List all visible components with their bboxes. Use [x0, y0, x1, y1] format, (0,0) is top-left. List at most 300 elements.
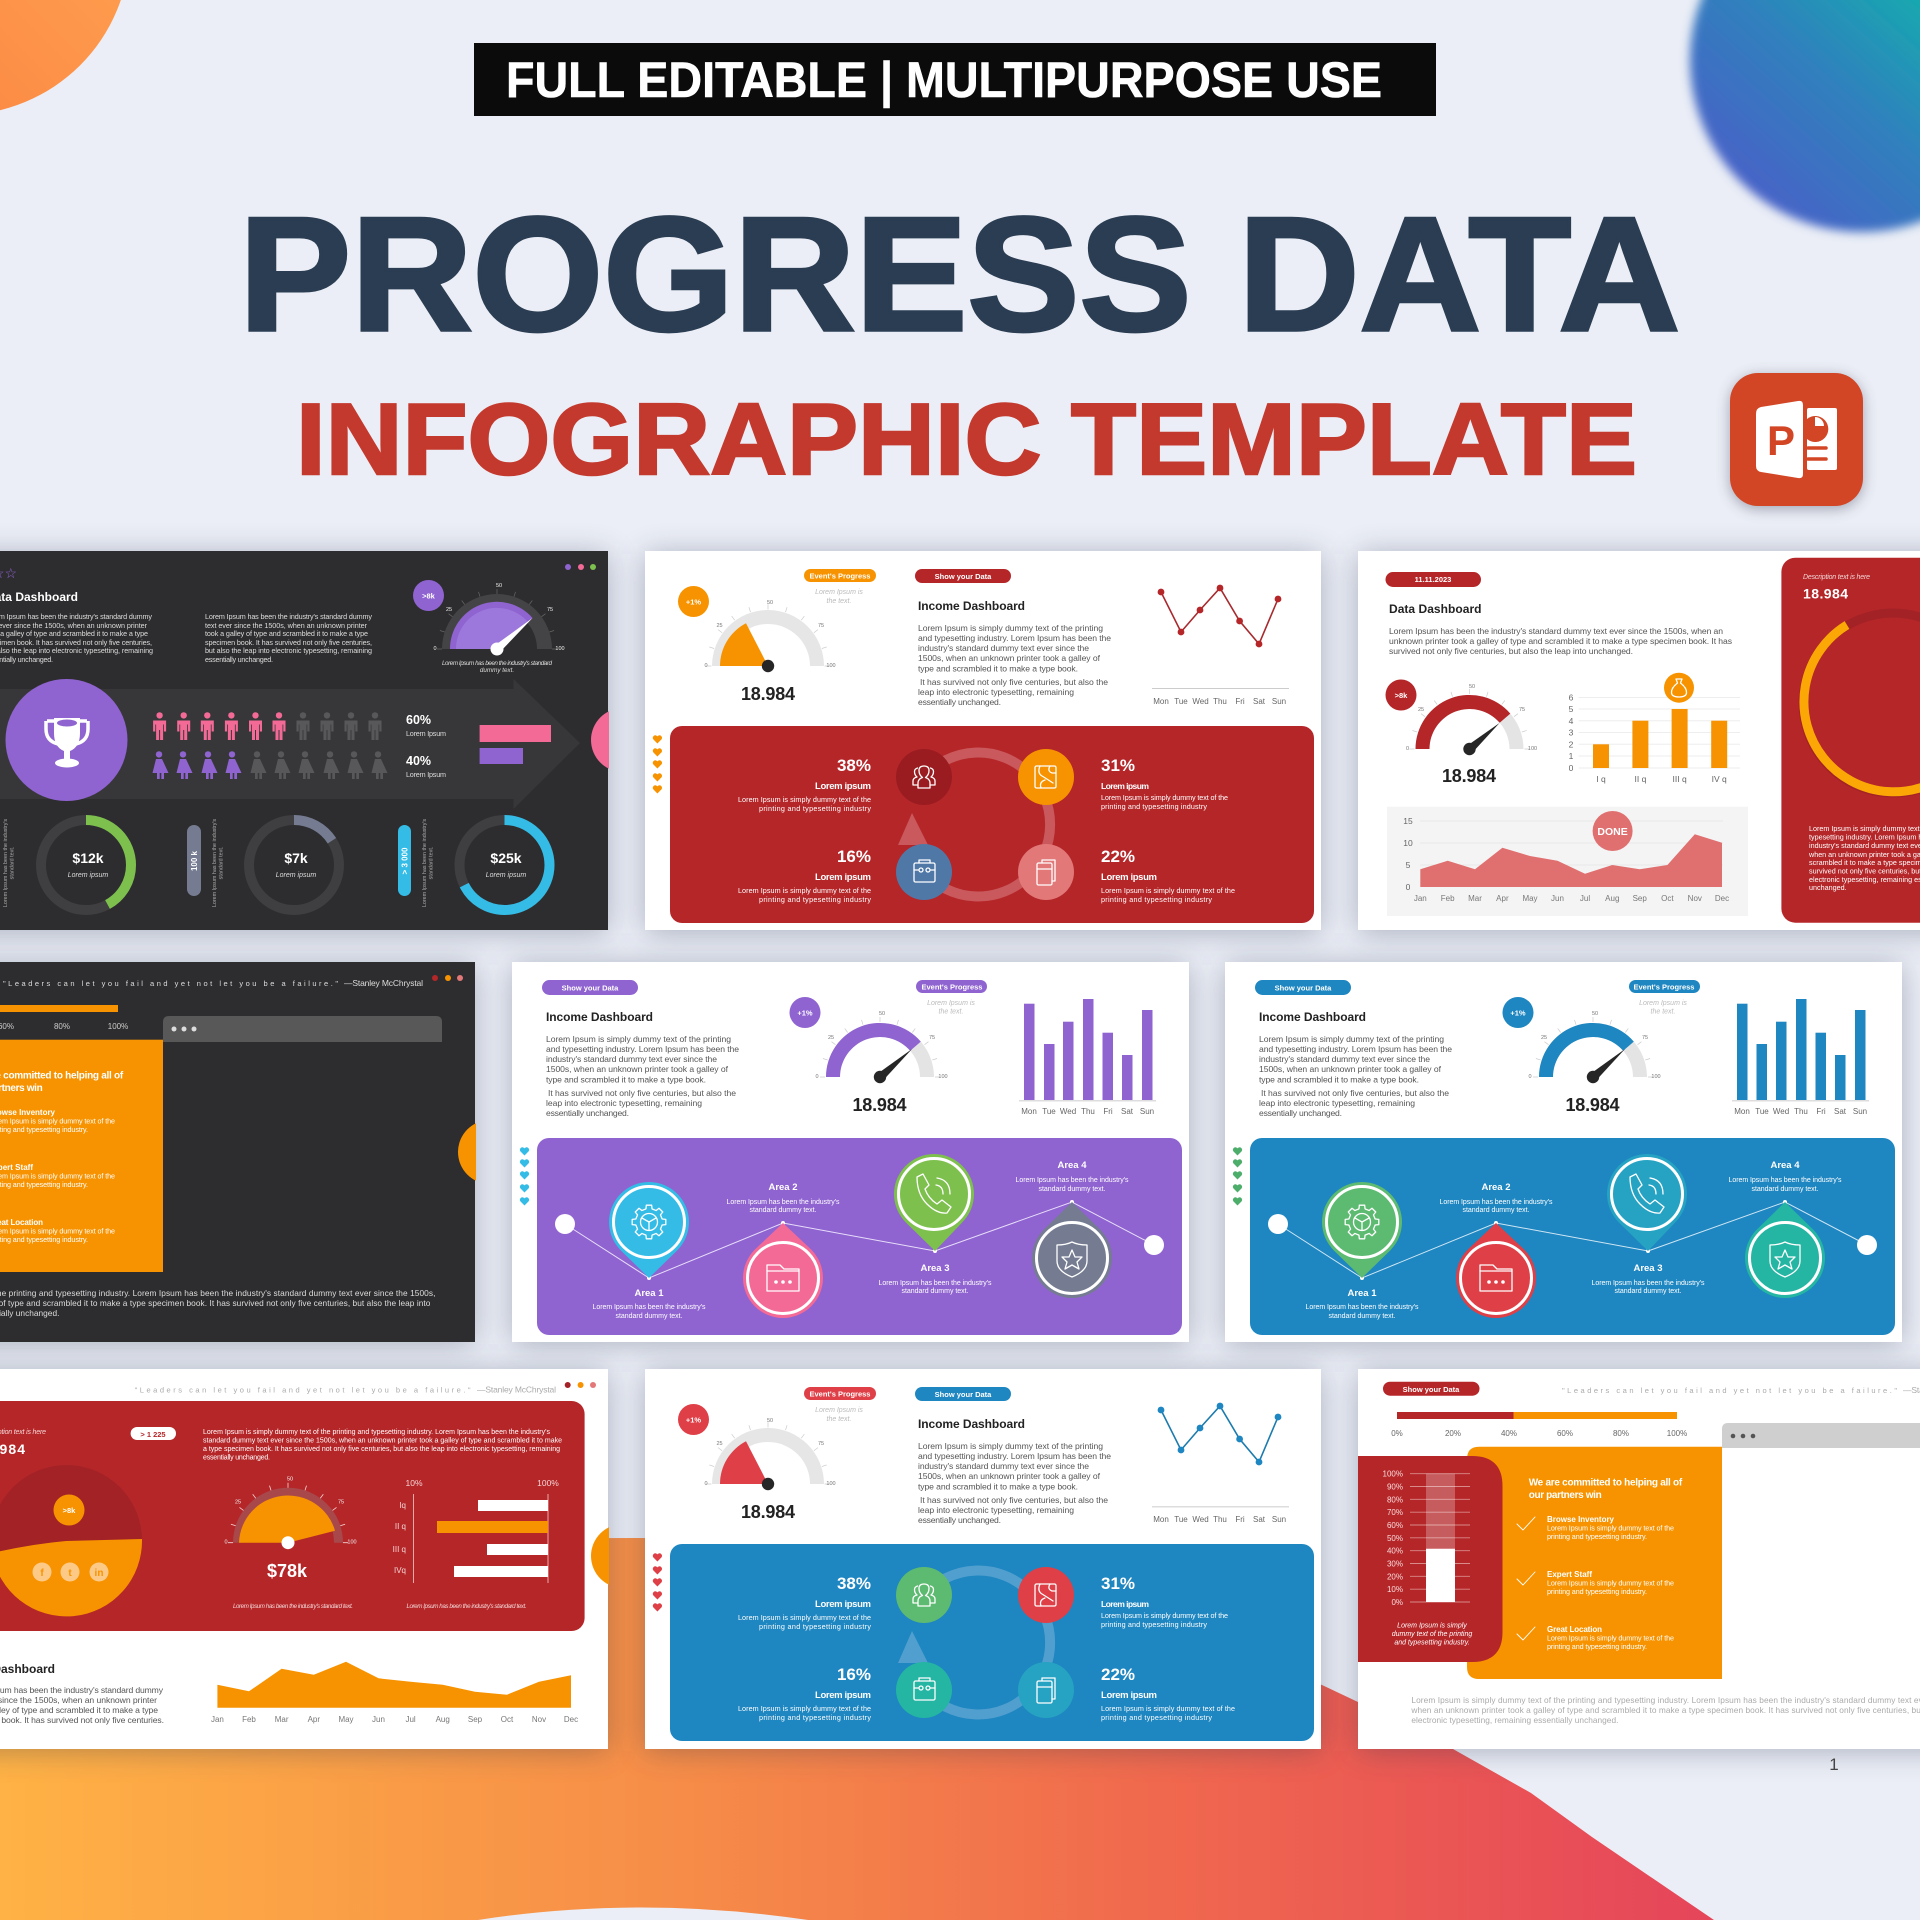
item 3	[0, 1218, 115, 1244]
side text: unchanged.	[1809, 883, 1847, 892]
hearts	[1233, 1147, 1242, 1206]
bar chart	[1569, 692, 1740, 784]
trophy circle	[6, 679, 128, 801]
area chart: Dec	[564, 1715, 578, 1724]
note: Lorem Ipsum is	[815, 1407, 863, 1414]
bar chart: Wed	[1060, 1107, 1076, 1116]
panel: thermometer: 90%	[1387, 1482, 1403, 1492]
gauge: 0	[704, 1481, 708, 1487]
area chart	[211, 1662, 578, 1724]
note	[815, 588, 863, 603]
bar chart: Mon	[1734, 1107, 1750, 1116]
area chart panel: Feb	[1441, 894, 1455, 903]
badge: plus one percent	[790, 997, 820, 1028]
stat 38: 38%	[837, 756, 871, 775]
bar chart: Fri	[1103, 1107, 1113, 1116]
pill: 1225	[131, 1427, 176, 1440]
slide 8: blue cycle	[645, 1369, 1321, 1749]
line chart	[1152, 585, 1289, 706]
area chart: Jan	[211, 1715, 224, 1724]
line chart: Sun	[1272, 697, 1286, 706]
stat 31	[1101, 756, 1228, 811]
slide 9: commitment white	[1358, 1369, 1920, 1749]
panel: red overview	[0, 1401, 585, 1631]
heading: Income Dashboard	[1259, 1010, 1366, 1024]
body text: It has survived not only five centuries, but also the	[548, 1088, 736, 1098]
panel: thermometer: 70%	[1387, 1508, 1403, 1517]
item 2: Lorem Ipsum is simply dummy text of the	[1547, 1578, 1674, 1588]
stat 60 percent: 60%	[406, 713, 431, 727]
area 3	[1592, 1263, 1705, 1295]
vertical caption 3: standard text.	[428, 847, 434, 879]
gauge caption: dummy text.	[480, 667, 514, 674]
stat 31: 31%	[1101, 1574, 1135, 1593]
slide 1: dark data dashboard	[0, 551, 655, 930]
bar chart: 2	[1569, 740, 1574, 750]
horizontal bars: II q	[395, 1522, 406, 1531]
area chart: Jun	[372, 1715, 385, 1724]
badge: plus one percent: +1%	[797, 1008, 813, 1018]
gauge: 50	[767, 600, 773, 606]
donut: 12k	[41, 820, 131, 910]
panel: red side: Description text is here	[1803, 574, 1870, 581]
panel: thermometer: 100%	[1383, 1470, 1403, 1479]
gauge: 50	[879, 1011, 885, 1017]
stat 38	[738, 1574, 871, 1631]
pill: events progress	[804, 1387, 876, 1400]
area chart panel: May	[1522, 894, 1538, 903]
gauge: 75	[338, 1500, 344, 1506]
quote: —Stanley McChrystal	[344, 978, 423, 988]
vertical caption 1: standard text.	[10, 847, 16, 879]
area chart: Feb	[242, 1715, 256, 1724]
area chart panel: Sep	[1633, 894, 1647, 903]
area 3: Lorem Ipsum has been the industry's	[878, 1280, 992, 1287]
gauge	[433, 583, 565, 656]
donut: 7k: Lorem ipsum	[276, 872, 316, 879]
badge: plus one percent: +1%	[686, 598, 701, 606]
note: Lorem Ipsum is	[815, 589, 863, 596]
item 1	[1517, 1515, 1674, 1541]
pill: show your data: Show your Data	[562, 984, 619, 992]
gauge: 100	[347, 1540, 357, 1546]
body text: survived not only five centuries, but also the leap into unchanged.	[1389, 646, 1633, 656]
horizontal bars: IVq	[394, 1566, 406, 1575]
stat 31: 31%	[1101, 756, 1135, 775]
gauge: 0	[815, 1074, 819, 1080]
progress bar: 100%	[108, 1022, 128, 1031]
slide 2: income dashboard red	[645, 551, 1321, 930]
stat 22: Lorem ipsum	[1101, 872, 1157, 883]
body text	[1259, 1034, 1452, 1118]
area 4	[1016, 1160, 1129, 1193]
body text: unknown printer took a galley of type and scrambled it to make a type specimen book. It has	[1389, 636, 1732, 646]
note	[815, 1407, 863, 1423]
stat 22: Lorem ipsum	[1101, 1690, 1157, 1701]
badge: plus one percent: +1%	[686, 1416, 701, 1424]
pill: show your data	[915, 1387, 1011, 1401]
bar chart: Sat	[1121, 1107, 1134, 1116]
pill: events progress: Event's Progress	[810, 1390, 870, 1398]
gauge: 25	[446, 607, 452, 613]
gauge value: 18.984	[1442, 766, 1496, 786]
stat 22: Lorem Ipsum is simply dummy text of the	[1101, 886, 1235, 895]
item 1	[0, 1108, 115, 1134]
item 3: printing and typesetting industry.	[1547, 1642, 1647, 1651]
stat 16	[738, 1665, 871, 1722]
gauge: 25	[828, 1035, 834, 1041]
hearts	[653, 735, 662, 794]
note: Lorem Ipsum is	[1639, 1000, 1687, 1007]
vertical caption 3: Lorem Ipsum has been the industry's	[422, 819, 428, 907]
progress bar	[0, 1005, 128, 1031]
body text: leap into electronic typesetting, remaining	[918, 687, 1074, 697]
body text: Lorem Ipsum is simply dummy text of the printing	[918, 1441, 1103, 1451]
stat 16: printing and typesetting industry	[759, 1713, 871, 1722]
area chart: Jul	[405, 1715, 416, 1724]
stat 16: Lorem Ipsum is simply dummy text of the	[738, 1704, 871, 1713]
donut: 7k: $7k	[284, 850, 308, 866]
stat 16: Lorem ipsum	[815, 872, 871, 883]
note	[1639, 1000, 1687, 1016]
footer text	[1410, 1695, 1920, 1725]
hearts	[653, 1553, 662, 1612]
panel: thermometer: 20%	[1387, 1572, 1403, 1581]
area 4: standard dummy text.	[1038, 1186, 1106, 1193]
text column 2: text ever since the 1500s, when an unknown printer	[205, 621, 368, 630]
item 3: Great Location	[1547, 1625, 1602, 1634]
line chart: Wed	[1192, 697, 1209, 706]
area chart panel: Dec	[1715, 894, 1729, 903]
body text: It has survived not only five centuries, but also the	[920, 1495, 1108, 1505]
area 2: standard dummy text.	[750, 1207, 817, 1214]
pin: shield	[1032, 1202, 1112, 1298]
pill: 1225: > 1 225	[140, 1430, 166, 1439]
area chart panel: 5	[1406, 860, 1411, 870]
gauge: 25	[235, 1500, 241, 1506]
line chart	[1152, 1403, 1289, 1524]
gauge: 50	[767, 1418, 773, 1424]
cycle ring	[924, 1570, 1050, 1714]
body text: leap into electronic typesetting, remaining	[918, 1505, 1074, 1515]
body text: Lorem Ipsum is simply dummy text of the printing	[918, 623, 1103, 633]
gauge	[1528, 1011, 1661, 1083]
done badge: DONE	[1597, 826, 1628, 838]
pill: date	[1386, 572, 1481, 587]
line chart: Mon	[1153, 1515, 1169, 1524]
stat 31: Lorem ipsum	[1101, 1599, 1149, 1609]
pill: show your data: Show your Data	[1403, 1385, 1460, 1394]
badge: 8k	[54, 1494, 84, 1526]
progress bar: 40%	[1501, 1429, 1517, 1438]
body text	[918, 623, 1111, 707]
stat 38: Lorem ipsum	[815, 781, 871, 792]
area 1	[592, 1288, 706, 1320]
area 1: Lorem Ipsum has been the industry's	[592, 1304, 706, 1311]
progress bar: 80%	[1613, 1429, 1629, 1438]
captions: Lorem Ipsum has been the industry's standard text.	[233, 1603, 353, 1610]
area 2	[726, 1182, 840, 1214]
footer text	[0, 1288, 435, 1318]
pill: events progress: Event's Progress	[810, 572, 870, 580]
badge: plus one percent: +1%	[1510, 1008, 1526, 1018]
vertical pill: 3 000: > 3 000	[400, 847, 410, 874]
panel: timeline	[537, 1138, 1182, 1335]
area 1	[1306, 1288, 1419, 1320]
pin: folder	[743, 1223, 823, 1318]
stat 38: printing and typesetting industry	[759, 804, 871, 813]
heading: Income Dashboard	[918, 599, 1025, 613]
item 2: printing and typesetting industry.	[1547, 1587, 1647, 1596]
node: briefcase	[896, 844, 952, 900]
pill: show your data	[542, 980, 638, 995]
horizontal bars: 100%	[537, 1478, 559, 1488]
donut: 25k: Lorem ipsum	[486, 872, 526, 879]
pill: date: 11.11.2023	[1415, 575, 1451, 584]
note: the text.	[827, 598, 852, 605]
social icons	[32, 1562, 108, 1582]
area chart: Apr	[308, 1715, 320, 1724]
panel text: Lorem Ipsum is simply dummy text of the printing and typesetting industry. Lorem Ipsum has been the industry's	[203, 1429, 550, 1436]
stat 16: Lorem Ipsum is simply dummy text of the	[738, 886, 871, 895]
area 2: Area 2	[768, 1182, 798, 1193]
body text: 1500s, when an unknown printer took a galley of	[1259, 1064, 1442, 1074]
body text: essentially unchanged.	[546, 1108, 629, 1118]
gauge: 100	[826, 1481, 836, 1487]
pill: events progress	[916, 980, 987, 993]
text column 2: took a galley of type and scrambled it to make a type	[205, 629, 368, 638]
stat 22: printing and typesetting industry	[1101, 895, 1212, 904]
badge: 8k: >8k	[422, 592, 436, 600]
panel: cycle	[670, 1544, 1314, 1741]
stat 22	[1101, 847, 1235, 904]
line chart: Tue	[1174, 697, 1188, 706]
panel: thermometer: Lorem Ipsum is simply	[1397, 1622, 1467, 1630]
progress bar: 20%	[1445, 1429, 1461, 1438]
node: document	[1018, 844, 1074, 900]
item 2: Expert Staff	[1547, 1570, 1592, 1579]
area chart: Sep	[468, 1715, 483, 1724]
bar chart: 5	[1569, 704, 1574, 714]
area 3: standard dummy text.	[902, 1288, 969, 1295]
body text: industry's standard dummy text ever since the	[918, 1461, 1089, 1471]
panel: commitment: We are committed to helping all of	[1529, 1478, 1683, 1488]
body text: 1500s, when an unknown printer took a galley of	[546, 1064, 729, 1074]
background shape: blue corner circle	[1690, 0, 1920, 232]
area 1: standard dummy text.	[616, 1313, 683, 1320]
line chart: Fri	[1235, 1515, 1245, 1524]
stat 31: Lorem Ipsum is simply dummy text of the	[1101, 793, 1228, 802]
window dots	[432, 975, 463, 981]
line chart: Wed	[1192, 1515, 1209, 1524]
panel: red side	[1781, 558, 1920, 923]
note	[927, 1000, 975, 1016]
area chart panel: Jul	[1580, 894, 1590, 903]
area chart panel: Jun	[1551, 894, 1564, 903]
gauge: 75	[1642, 1035, 1648, 1041]
body text: industry's standard dummy text ever since the	[1259, 1054, 1430, 1064]
area 3: Area 3	[1633, 1263, 1663, 1274]
icon: powerpoint logo	[1730, 373, 1863, 509]
background shape: orange corner circle	[0, 0, 130, 115]
badge: 8k: >8k	[1395, 691, 1408, 700]
donut: 12k: Lorem ipsum	[68, 872, 108, 879]
body text: Lorem Ipsum has been the industry's standard dummy text ever since the 1500s, when an	[1389, 626, 1723, 636]
progress ring	[1803, 613, 1920, 793]
node: briefcase	[896, 1662, 952, 1718]
stat 22: 22%	[1101, 847, 1135, 866]
stat 31: printing and typesetting industry	[1101, 1620, 1207, 1629]
stat 16: 16%	[837, 1665, 871, 1684]
bar chart: IV q	[1712, 774, 1727, 784]
gauge value: 18.984	[741, 1502, 795, 1522]
gauge	[704, 1418, 836, 1490]
panel: thermometer: 80%	[1387, 1495, 1403, 1504]
area chart: May	[338, 1715, 354, 1724]
bar chart: 6	[1569, 692, 1574, 702]
pill: events progress	[804, 569, 876, 582]
pin: shield	[1745, 1202, 1825, 1298]
badge: plus one percent	[678, 1404, 709, 1435]
stat 16	[738, 847, 871, 904]
body text	[1389, 626, 1732, 656]
quote: "Leaders can let you fail and yet not let you be a failure."	[1562, 1386, 1897, 1395]
pill: show your data	[1255, 980, 1351, 995]
area chart panel: 0	[1406, 882, 1411, 892]
stat 22	[1101, 1665, 1235, 1722]
pill: events progress	[1629, 980, 1700, 993]
bar chart: 1	[1569, 751, 1574, 761]
bar chart: 4	[1569, 716, 1574, 726]
badge: plus one percent	[678, 586, 709, 617]
area 4	[1728, 1160, 1842, 1193]
background shape: orange red wave	[0, 1538, 1714, 1920]
panel: thermometer: 40%	[1387, 1547, 1403, 1556]
area chart panel: Jan	[1414, 894, 1427, 903]
captions: Lorem Ipsum has been the industry's standard text.	[406, 1603, 526, 1610]
stat 38: Lorem ipsum	[815, 1599, 871, 1610]
stat 31: Lorem ipsum	[1101, 781, 1149, 791]
gauge: 50	[1469, 684, 1475, 690]
area 2: Lorem Ipsum has been the industry's	[1440, 1199, 1553, 1206]
item 1: Lorem Ipsum is simply dummy text of the	[1547, 1524, 1674, 1532]
panel: timeline	[1250, 1138, 1895, 1335]
panel text: standard dummy text ever since the 1500s, when an unknown printer took a galley of type and scrambled it to make	[203, 1438, 562, 1444]
body text: 1500s, when an unknown printer took a galley of	[918, 653, 1101, 663]
node: people	[896, 1567, 952, 1623]
quote: "Leaders can let you fail and yet not let you be a failure."	[135, 1386, 471, 1395]
area chart panel: Oct	[1661, 894, 1674, 903]
text column 2: specimen book. It has survived not only five centuries,	[205, 638, 372, 647]
area 4: Area 4	[1057, 1160, 1087, 1171]
bar chart: Fri	[1816, 1107, 1826, 1116]
timeline path	[555, 1200, 1164, 1280]
pin: gear	[1322, 1182, 1402, 1278]
gauge value: 18.984	[741, 684, 795, 704]
panel text: a type specimen book. It has survived not only five centuries, but also the leap into electronic typesetting, remaining	[203, 1446, 560, 1453]
slide 6: blue income dashboard	[1225, 962, 1902, 1342]
bar chart	[1019, 999, 1156, 1116]
gauge: 75	[818, 623, 824, 629]
item 2	[0, 1163, 115, 1189]
body text: 1500s, when an unknown printer took a galley of	[918, 1471, 1101, 1481]
line chart: Sat	[1253, 697, 1266, 706]
gauge	[704, 600, 836, 672]
pin: folder	[1456, 1223, 1536, 1318]
gauge: 100	[1651, 1074, 1661, 1080]
social icons: in	[95, 1568, 103, 1579]
bar chart: 3	[1569, 728, 1574, 738]
gauge: 100	[1528, 746, 1537, 752]
pill: events progress: Event's Progress	[922, 982, 982, 992]
gauge value: 18.984	[852, 1095, 906, 1115]
stat 40 percent: 40%	[406, 754, 431, 768]
line chart: Mon	[1153, 697, 1169, 706]
progress bar: 60%	[1557, 1429, 1573, 1438]
area chart panel: 10	[1403, 838, 1413, 848]
vertical caption 2: standard text.	[218, 847, 224, 879]
pill: events progress: Event's Progress	[1634, 982, 1694, 992]
body text: type and scrambled it to make a type book.	[546, 1074, 706, 1084]
window bar	[163, 1016, 442, 1042]
area chart panel	[1387, 807, 1748, 916]
pill: show your data	[915, 569, 1011, 583]
item 2	[1517, 1570, 1674, 1596]
area 4: standard dummy text.	[1752, 1186, 1819, 1193]
pin: phone	[894, 1154, 974, 1251]
panel: commitment	[1467, 1447, 1722, 1679]
body text: essentially unchanged.	[918, 1515, 1001, 1525]
stat 40 percent: Lorem Ipsum	[406, 770, 446, 779]
panel text: essentially unchanged.	[203, 1454, 270, 1462]
panel: thermometer: and typesetting industry.	[1394, 1640, 1470, 1646]
body text: leap into electronic typesetting, remaining	[546, 1098, 702, 1108]
horizontal bars	[393, 1478, 559, 1583]
bar chart: Wed	[1773, 1107, 1789, 1116]
panel: commitment	[0, 1040, 163, 1272]
window dots	[565, 564, 596, 570]
area 1: Area 1	[1347, 1288, 1377, 1299]
stat 16: 16%	[837, 847, 871, 866]
body text: It has survived not only five centuries, but also the	[920, 677, 1108, 687]
stat 16: printing and typesetting industry	[759, 895, 871, 904]
heading: Data Dashboard	[1389, 602, 1482, 616]
text column 2	[205, 612, 372, 664]
horizontal bars: 10%	[405, 1478, 423, 1488]
cycle arrow	[898, 813, 928, 845]
gauge: 50	[1592, 1011, 1598, 1017]
slide 7: red overview	[0, 1369, 655, 1749]
horizontal bars: Iq	[399, 1501, 406, 1510]
bar chart: Thu	[1081, 1107, 1095, 1116]
men pictogram row	[153, 712, 382, 740]
body text: essentially unchanged.	[918, 697, 1001, 707]
stat 60 percent: Lorem Ipsum	[406, 729, 446, 738]
body text: type and scrambled it to make a type book.	[918, 1482, 1078, 1492]
slide 3: data dashboard white	[1358, 551, 1920, 930]
background shape: white bottom curve	[478, 1908, 808, 1920]
area chart panel: Mar	[1468, 894, 1482, 903]
social icons: f	[40, 1568, 44, 1579]
pill: show your data: Show your Data	[935, 1390, 992, 1399]
quote: —Stanley McChrystal	[477, 1385, 556, 1395]
bar chart: Thu	[1794, 1107, 1808, 1116]
panel: cycle	[670, 726, 1314, 923]
gauge: 50	[496, 583, 502, 589]
gauge caption	[442, 660, 552, 674]
social icons: t	[68, 1568, 72, 1579]
body text: industry's standard dummy text ever since the	[546, 1054, 717, 1064]
